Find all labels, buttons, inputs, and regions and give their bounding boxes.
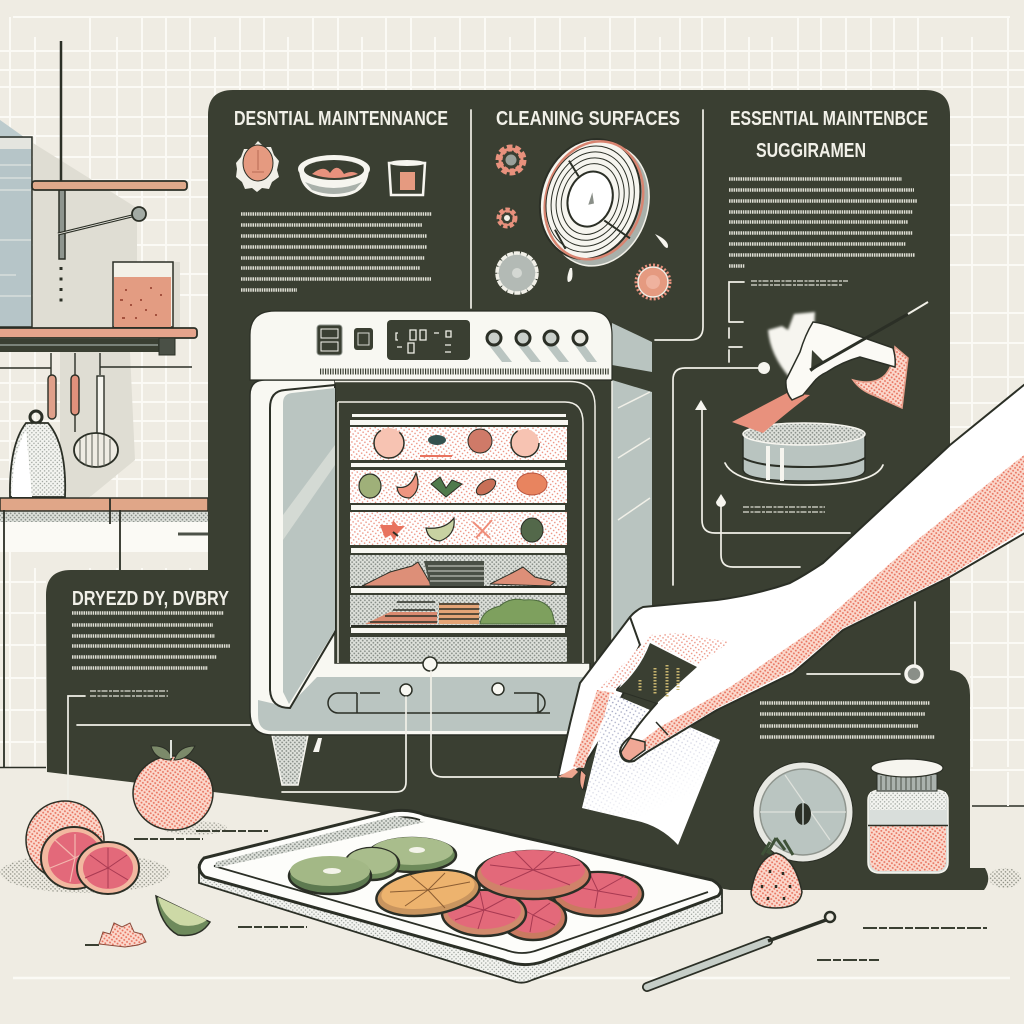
red citrus slices	[442, 872, 643, 940]
arm stipple	[636, 455, 1024, 750]
hand wiping with cloth	[558, 380, 1024, 845]
shelf rails	[350, 414, 568, 633]
connector lines	[68, 696, 250, 802]
icon: silver gear	[497, 253, 537, 293]
icon: gear	[499, 148, 523, 172]
kiwi slices	[289, 837, 456, 894]
serving tray	[199, 810, 722, 983]
shelf 3 food	[380, 518, 543, 542]
interior frame lines	[335, 381, 612, 663]
icon: sun badge	[236, 141, 279, 192]
connector lines	[673, 362, 850, 585]
jar on shelf	[113, 262, 173, 327]
storage jar	[868, 759, 948, 873]
kettle	[10, 411, 65, 497]
cloth	[732, 393, 810, 433]
thumb nail	[621, 738, 645, 761]
oven side	[612, 323, 652, 690]
callout bracket	[729, 282, 744, 362]
heading: ESSENTIAL MAINTENBCE	[730, 108, 928, 130]
apple	[133, 740, 227, 835]
upper shelf with rod	[32, 41, 187, 303]
clock dial	[753, 762, 853, 862]
lower body text lines	[760, 703, 935, 737]
panel: drying	[68, 588, 250, 802]
panel: cleaning surfaces	[496, 108, 680, 299]
subheading: SUGGIRAMEN	[756, 140, 866, 162]
brush	[810, 314, 908, 370]
oven legs	[272, 735, 322, 785]
panel: essential maintenance	[234, 108, 448, 290]
gap between fingers	[617, 643, 697, 703]
shelf 2 food	[359, 473, 547, 498]
back fingers	[558, 617, 660, 790]
oven base	[258, 677, 590, 731]
grapefruit slice back	[41, 827, 107, 889]
burst glow	[768, 312, 815, 378]
dried flake	[99, 923, 146, 947]
peach	[26, 801, 104, 879]
ventilation ticks	[320, 368, 610, 374]
oven callout lines	[282, 671, 560, 792]
tray top	[199, 810, 721, 965]
tray side	[199, 865, 722, 983]
fridge	[0, 120, 32, 327]
tool on counter	[647, 912, 835, 987]
small caption	[751, 281, 848, 285]
grapefruit slice front	[77, 842, 139, 894]
panel: essential maintenance suggestions	[673, 108, 935, 737]
heading: CLEANING SURFACES	[496, 108, 680, 130]
small caption	[90, 691, 168, 696]
large red slice	[476, 850, 590, 899]
body text lines	[729, 179, 917, 266]
control buttons	[317, 325, 373, 355]
fruit group left	[0, 801, 170, 894]
oven body	[250, 380, 590, 735]
icon: cleaning disc	[523, 126, 665, 279]
wall shadow	[33, 143, 180, 497]
lime wedge	[156, 896, 210, 935]
strawberry	[751, 838, 802, 908]
knuckle stipple	[600, 633, 730, 688]
shelf 5 food	[351, 599, 567, 627]
dehydrator oven	[250, 311, 652, 785]
hand with cloth and brush	[732, 302, 928, 433]
control knobs	[487, 331, 597, 362]
icon: copper gear	[636, 265, 670, 299]
icon: droplets	[567, 234, 668, 282]
digital display	[387, 320, 470, 360]
oven interior	[335, 381, 612, 663]
dark background panel	[46, 90, 988, 890]
counter and cabinets	[0, 498, 208, 768]
dish being wiped	[725, 423, 883, 485]
hanging utensils	[48, 375, 118, 467]
arm and palm	[617, 380, 1024, 762]
panel dividers	[471, 110, 703, 340]
lower shelf	[0, 328, 197, 375]
base controls	[328, 657, 550, 713]
oven top panel	[250, 311, 612, 380]
body text lines	[72, 613, 230, 668]
stipple shadow	[0, 853, 170, 893]
body text lines	[241, 214, 432, 290]
shelf 4 food	[351, 561, 567, 588]
tray inner rim	[214, 817, 708, 953]
heading: DESNTIAL MAINTENNANCE	[234, 108, 448, 130]
icon: bowl	[298, 155, 370, 197]
shelf 1 food	[374, 428, 539, 458]
icon: small gear	[499, 210, 515, 226]
shelf trays	[350, 427, 567, 662]
hand	[786, 322, 895, 400]
callout dot	[807, 602, 922, 682]
floor dashes	[13, 831, 1021, 978]
sleeve	[853, 347, 908, 408]
orange slice	[373, 864, 483, 922]
open door	[270, 385, 335, 708]
kitchen shelves background	[0, 41, 208, 768]
cloth	[582, 693, 720, 845]
icon: cup	[389, 160, 425, 195]
heading: DRYEZD DY, DVBRY	[72, 588, 230, 610]
